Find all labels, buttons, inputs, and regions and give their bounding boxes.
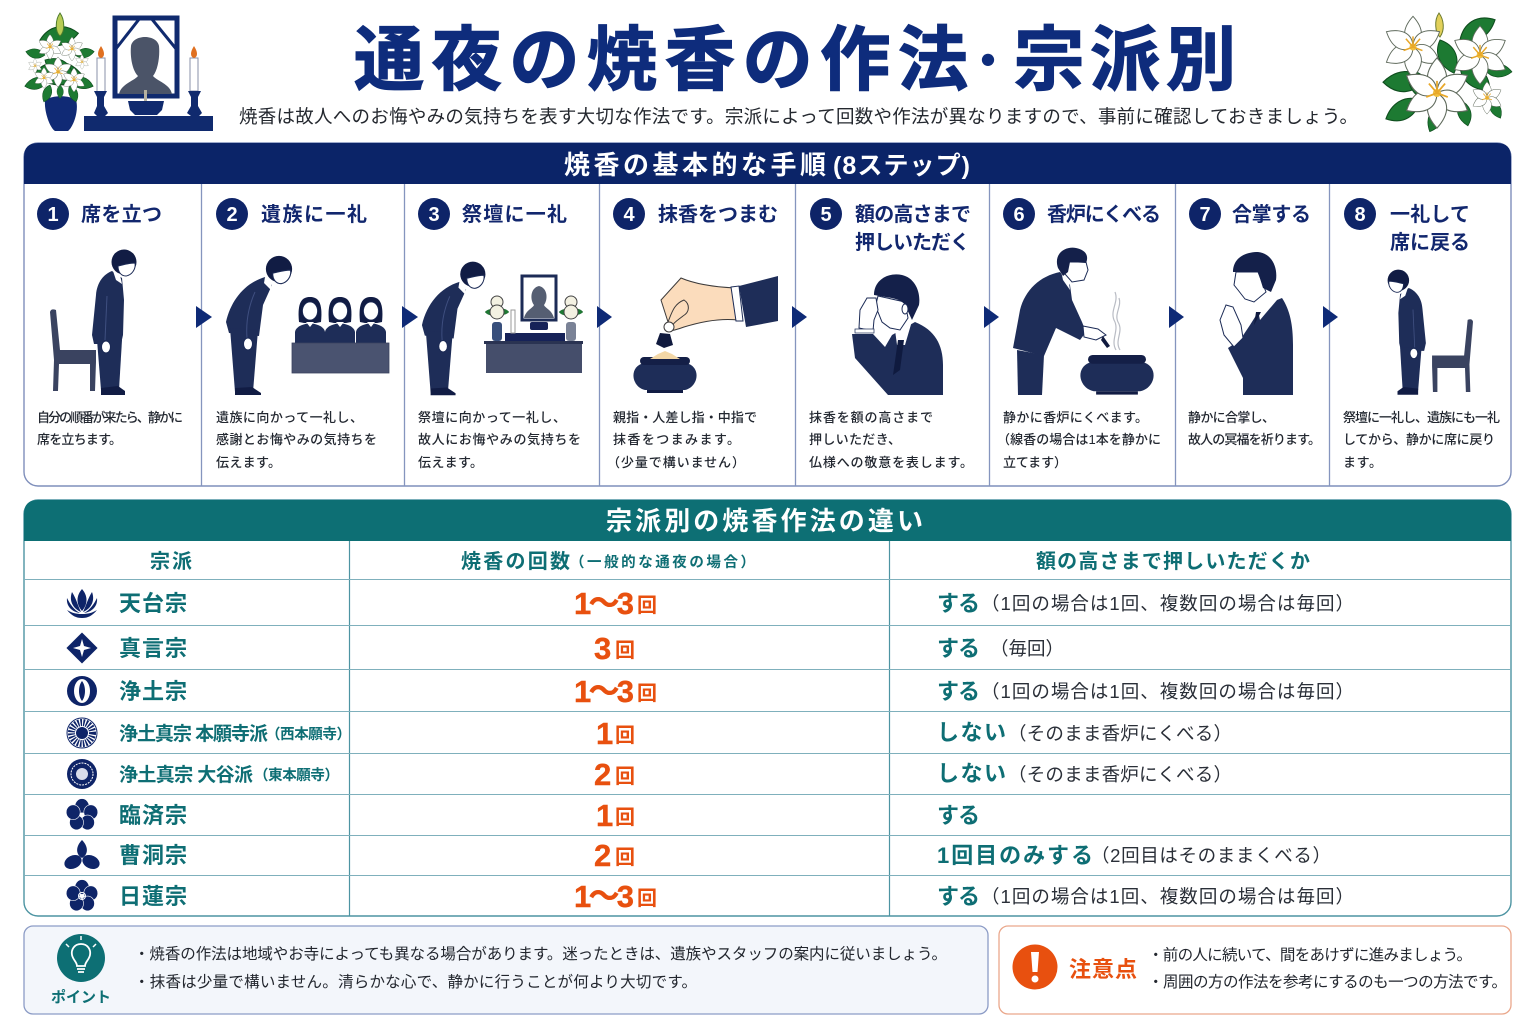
point label: ポイント bbox=[51, 989, 111, 1006]
row: 日蓮宗: 1〜3 bbox=[574, 879, 634, 914]
row: 浄土宗: 回 bbox=[637, 683, 657, 705]
panel: differences by sect bbox=[24, 500, 1511, 916]
icon: rinzai crest bbox=[66, 799, 98, 830]
arrow bbox=[597, 306, 612, 328]
step 3: 祭壇に向かって一礼し、 bbox=[418, 410, 566, 425]
row: 日蓮宗: する bbox=[937, 884, 980, 909]
step 3: 3 bbox=[428, 204, 440, 226]
arrow bbox=[196, 306, 212, 328]
row: 曹洞宗 bbox=[62, 838, 1331, 873]
row: 本願寺派: 回 bbox=[615, 725, 635, 747]
arrow bbox=[402, 306, 418, 328]
step 8: してから、静かに席に戻り bbox=[1343, 432, 1495, 447]
icon: nichiren crest bbox=[66, 880, 98, 911]
column headers: 額の高さまで押しいただくか bbox=[1036, 550, 1310, 573]
caution label: 注意点 bbox=[1069, 957, 1137, 982]
row: 日蓮宗 bbox=[66, 879, 1354, 914]
step 6 bbox=[997, 198, 1161, 470]
icon: lily bouquet bbox=[1382, 11, 1512, 134]
point text bbox=[134, 945, 947, 991]
step 3: 祭壇に一礼 bbox=[462, 203, 567, 226]
row: 日蓮宗: （1回の場合は1回、複数回の場合は毎回） bbox=[981, 886, 1354, 907]
row: 曹洞宗: 曹洞宗 bbox=[119, 843, 187, 868]
icon: light bulb bbox=[57, 934, 105, 982]
row: 曹洞宗: 回 bbox=[615, 847, 635, 869]
step 1: 席を立つ bbox=[81, 203, 162, 226]
steps heading bbox=[564, 150, 970, 180]
table heading: 宗派別の焼香作法の違い bbox=[606, 506, 923, 536]
row: 本願寺派: しない bbox=[937, 720, 1006, 745]
step 7: 7 bbox=[1199, 204, 1211, 226]
row: 日蓮宗: 日蓮宗 bbox=[119, 884, 187, 909]
panel: point bbox=[24, 926, 988, 1014]
caution text bbox=[1148, 946, 1507, 991]
row: 曹洞宗: 2 bbox=[594, 838, 611, 873]
step 5: 仏様への敬意を表します。 bbox=[809, 455, 973, 470]
row: 天台宗: 1〜3 bbox=[574, 586, 634, 621]
title bbox=[354, 21, 1236, 99]
row: 真言宗 bbox=[66, 631, 1064, 666]
step 6: 6 bbox=[1013, 204, 1025, 226]
steps heading: 焼香の基本的な手順 bbox=[564, 150, 826, 180]
step 4: 抹香をつまむ bbox=[658, 203, 778, 226]
row: 臨済宗: する bbox=[937, 803, 980, 828]
column headers: 焼香の回数 bbox=[461, 550, 570, 573]
row: 天台宗: 回 bbox=[637, 595, 657, 617]
row: 真言宗: （毎回） bbox=[990, 638, 1064, 659]
steps heading: (8ステップ) bbox=[833, 152, 970, 180]
row: 天台宗: する bbox=[937, 591, 980, 616]
icon: jodo crest bbox=[67, 676, 97, 706]
step 6: （線香の場合は1本を静かに bbox=[997, 432, 1161, 447]
row: 本願寺派: 浄土真宗 本願寺派 bbox=[119, 723, 268, 745]
row: 臨済宗: 回 bbox=[615, 807, 635, 829]
step 2: 2 bbox=[226, 204, 238, 226]
step 5 bbox=[809, 198, 973, 470]
step 4 bbox=[607, 198, 778, 470]
step 8: 8 bbox=[1354, 204, 1366, 226]
subtitle: 焼香は故人へのお悔やみの気持ちを表す大切な作法です。宗派によって回数や作法が異なりますので、事前に確認しておきましょう。 bbox=[239, 106, 1358, 127]
column headers: 宗派 bbox=[150, 550, 192, 573]
row: 天台宗 bbox=[67, 586, 1354, 621]
row: 大谷派: しない bbox=[937, 761, 1006, 786]
step 3: 伝えます。 bbox=[418, 455, 483, 470]
title: ・ bbox=[964, 36, 1012, 89]
row: 曹洞宗: （2回目はそのままくべる） bbox=[1091, 845, 1331, 866]
panel: caution bbox=[999, 926, 1511, 1014]
title: 通夜の焼香の作法 bbox=[354, 21, 968, 99]
row: 浄土宗: する bbox=[937, 679, 980, 704]
step 3: 故人にお悔やみの気持ちを bbox=[418, 432, 581, 447]
caution text: ・周囲の方の作法を参考にするのも一つの方法です。 bbox=[1148, 973, 1507, 991]
step 4: 親指・人差し指・中指で bbox=[613, 410, 757, 425]
step 5: 抹香を額の高さまで bbox=[809, 410, 933, 425]
row: 天台宗: 天台宗 bbox=[119, 591, 187, 616]
icon: lotus bbox=[67, 589, 97, 618]
row: 大谷派: （そのまま香炉にくべる） bbox=[1008, 764, 1232, 785]
row: 本願寺派: （西本願寺） bbox=[266, 726, 351, 743]
row: 本願寺派: （そのまま香炉にくべる） bbox=[1008, 723, 1232, 744]
step 7: 静かに合掌し、 bbox=[1188, 410, 1275, 425]
step 8: ます。 bbox=[1343, 455, 1382, 470]
icon: diamond bbox=[66, 632, 98, 664]
icon: hongwanji crest bbox=[67, 718, 97, 748]
step 2: 伝えます。 bbox=[216, 455, 281, 470]
row: 臨済宗: 臨済宗 bbox=[119, 803, 187, 828]
row: 大谷派: （東本願寺） bbox=[254, 767, 339, 784]
row: 浄土宗: （1回の場合は1回、複数回の場合は毎回） bbox=[981, 681, 1354, 702]
row: 真言宗: する bbox=[937, 636, 980, 661]
step 8: 一礼して bbox=[1390, 203, 1470, 226]
icon: exclamation bbox=[1012, 944, 1058, 990]
step 4: 4 bbox=[623, 204, 635, 226]
arrow bbox=[792, 306, 807, 328]
row: 曹洞宗: 1回目のみする bbox=[937, 843, 1093, 868]
step 6: 立てます） bbox=[1003, 455, 1067, 470]
point text: ・抹香は少量で構いません。清らかな心で、静かに行うことが何より大切です。 bbox=[134, 973, 697, 991]
step 3 bbox=[418, 198, 583, 470]
arrow bbox=[1169, 306, 1184, 328]
caution text: ・前の人に続いて、間をあけずに進みましょう。 bbox=[1148, 946, 1472, 964]
row: 本願寺派: 1 bbox=[596, 716, 613, 751]
step 4: （少量で構いません） bbox=[607, 455, 745, 470]
column headers: （一般的な通夜の場合） bbox=[570, 553, 755, 571]
row: 大谷派 bbox=[67, 757, 1232, 792]
step 6: 香炉にくべる bbox=[1047, 203, 1161, 226]
panel: basic steps bbox=[24, 143, 1511, 486]
step 2: 遺族に向かって一礼し、 bbox=[216, 410, 363, 425]
column headers bbox=[150, 550, 1310, 573]
step 1: 1 bbox=[47, 204, 59, 226]
step 4: 抹香をつまみます。 bbox=[613, 432, 740, 447]
table header bar bbox=[24, 500, 1511, 541]
row: 臨済宗: 1 bbox=[596, 798, 613, 833]
title: 宗派別 bbox=[1014, 21, 1236, 99]
row: 大谷派: 回 bbox=[615, 766, 635, 788]
step 1: 自分の順番が来たら、静かに bbox=[37, 410, 183, 425]
arrow bbox=[1323, 306, 1338, 328]
row: 真言宗: 回 bbox=[615, 640, 635, 662]
step 2 bbox=[216, 198, 389, 470]
row: 天台宗: （1回の場合は1回、複数回の場合は毎回） bbox=[981, 593, 1354, 614]
point text: ・焼香の作法は地域やお寺によっても異なる場合があります。迷ったときは、遺族やスタッフの案内に従いましょう。 bbox=[134, 945, 947, 963]
step 8 bbox=[1343, 198, 1500, 470]
step 7 bbox=[1188, 198, 1321, 447]
step 2: 遺族に一礼 bbox=[261, 203, 367, 226]
step 7: 故人の冥福を祈ります。 bbox=[1188, 432, 1321, 447]
step 5: 額の高さまで bbox=[855, 203, 971, 226]
row: 臨済宗 bbox=[66, 798, 980, 833]
row: 大谷派: 2 bbox=[594, 757, 611, 792]
row: 真言宗: 3 bbox=[594, 631, 611, 666]
step 8: 祭壇に一礼し、遺族にも一礼 bbox=[1343, 410, 1500, 425]
row: 大谷派: 浄土真宗 大谷派 bbox=[119, 764, 253, 786]
step 5: 5 bbox=[820, 204, 832, 226]
step 5: 押しいただく bbox=[855, 231, 970, 254]
step 8: 席に戻る bbox=[1390, 231, 1470, 254]
row: 本願寺派 bbox=[67, 716, 1232, 751]
step 1 bbox=[37, 198, 183, 447]
step 6: 静かに香炉にくべます。 bbox=[1003, 410, 1148, 425]
arrow bbox=[984, 306, 999, 328]
row: 真言宗: 真言宗 bbox=[119, 636, 187, 661]
row: 浄土宗: 1〜3 bbox=[574, 674, 634, 709]
step 1: 席を立ちます。 bbox=[37, 432, 122, 447]
icon: soto crest bbox=[62, 840, 102, 872]
step 2: 感謝とお悔やみの気持ちを bbox=[216, 432, 377, 447]
step 5: 押しいただき、 bbox=[809, 432, 901, 447]
icon: otani crest bbox=[67, 759, 97, 789]
steps header bar bbox=[24, 143, 1511, 184]
step 7: 合掌する bbox=[1232, 203, 1311, 226]
icon: flower arrangement and altar bbox=[23, 13, 213, 131]
row: 浄土宗 bbox=[67, 674, 1354, 709]
row: 浄土宗: 浄土宗 bbox=[119, 679, 187, 704]
row: 日蓮宗: 回 bbox=[637, 888, 657, 910]
